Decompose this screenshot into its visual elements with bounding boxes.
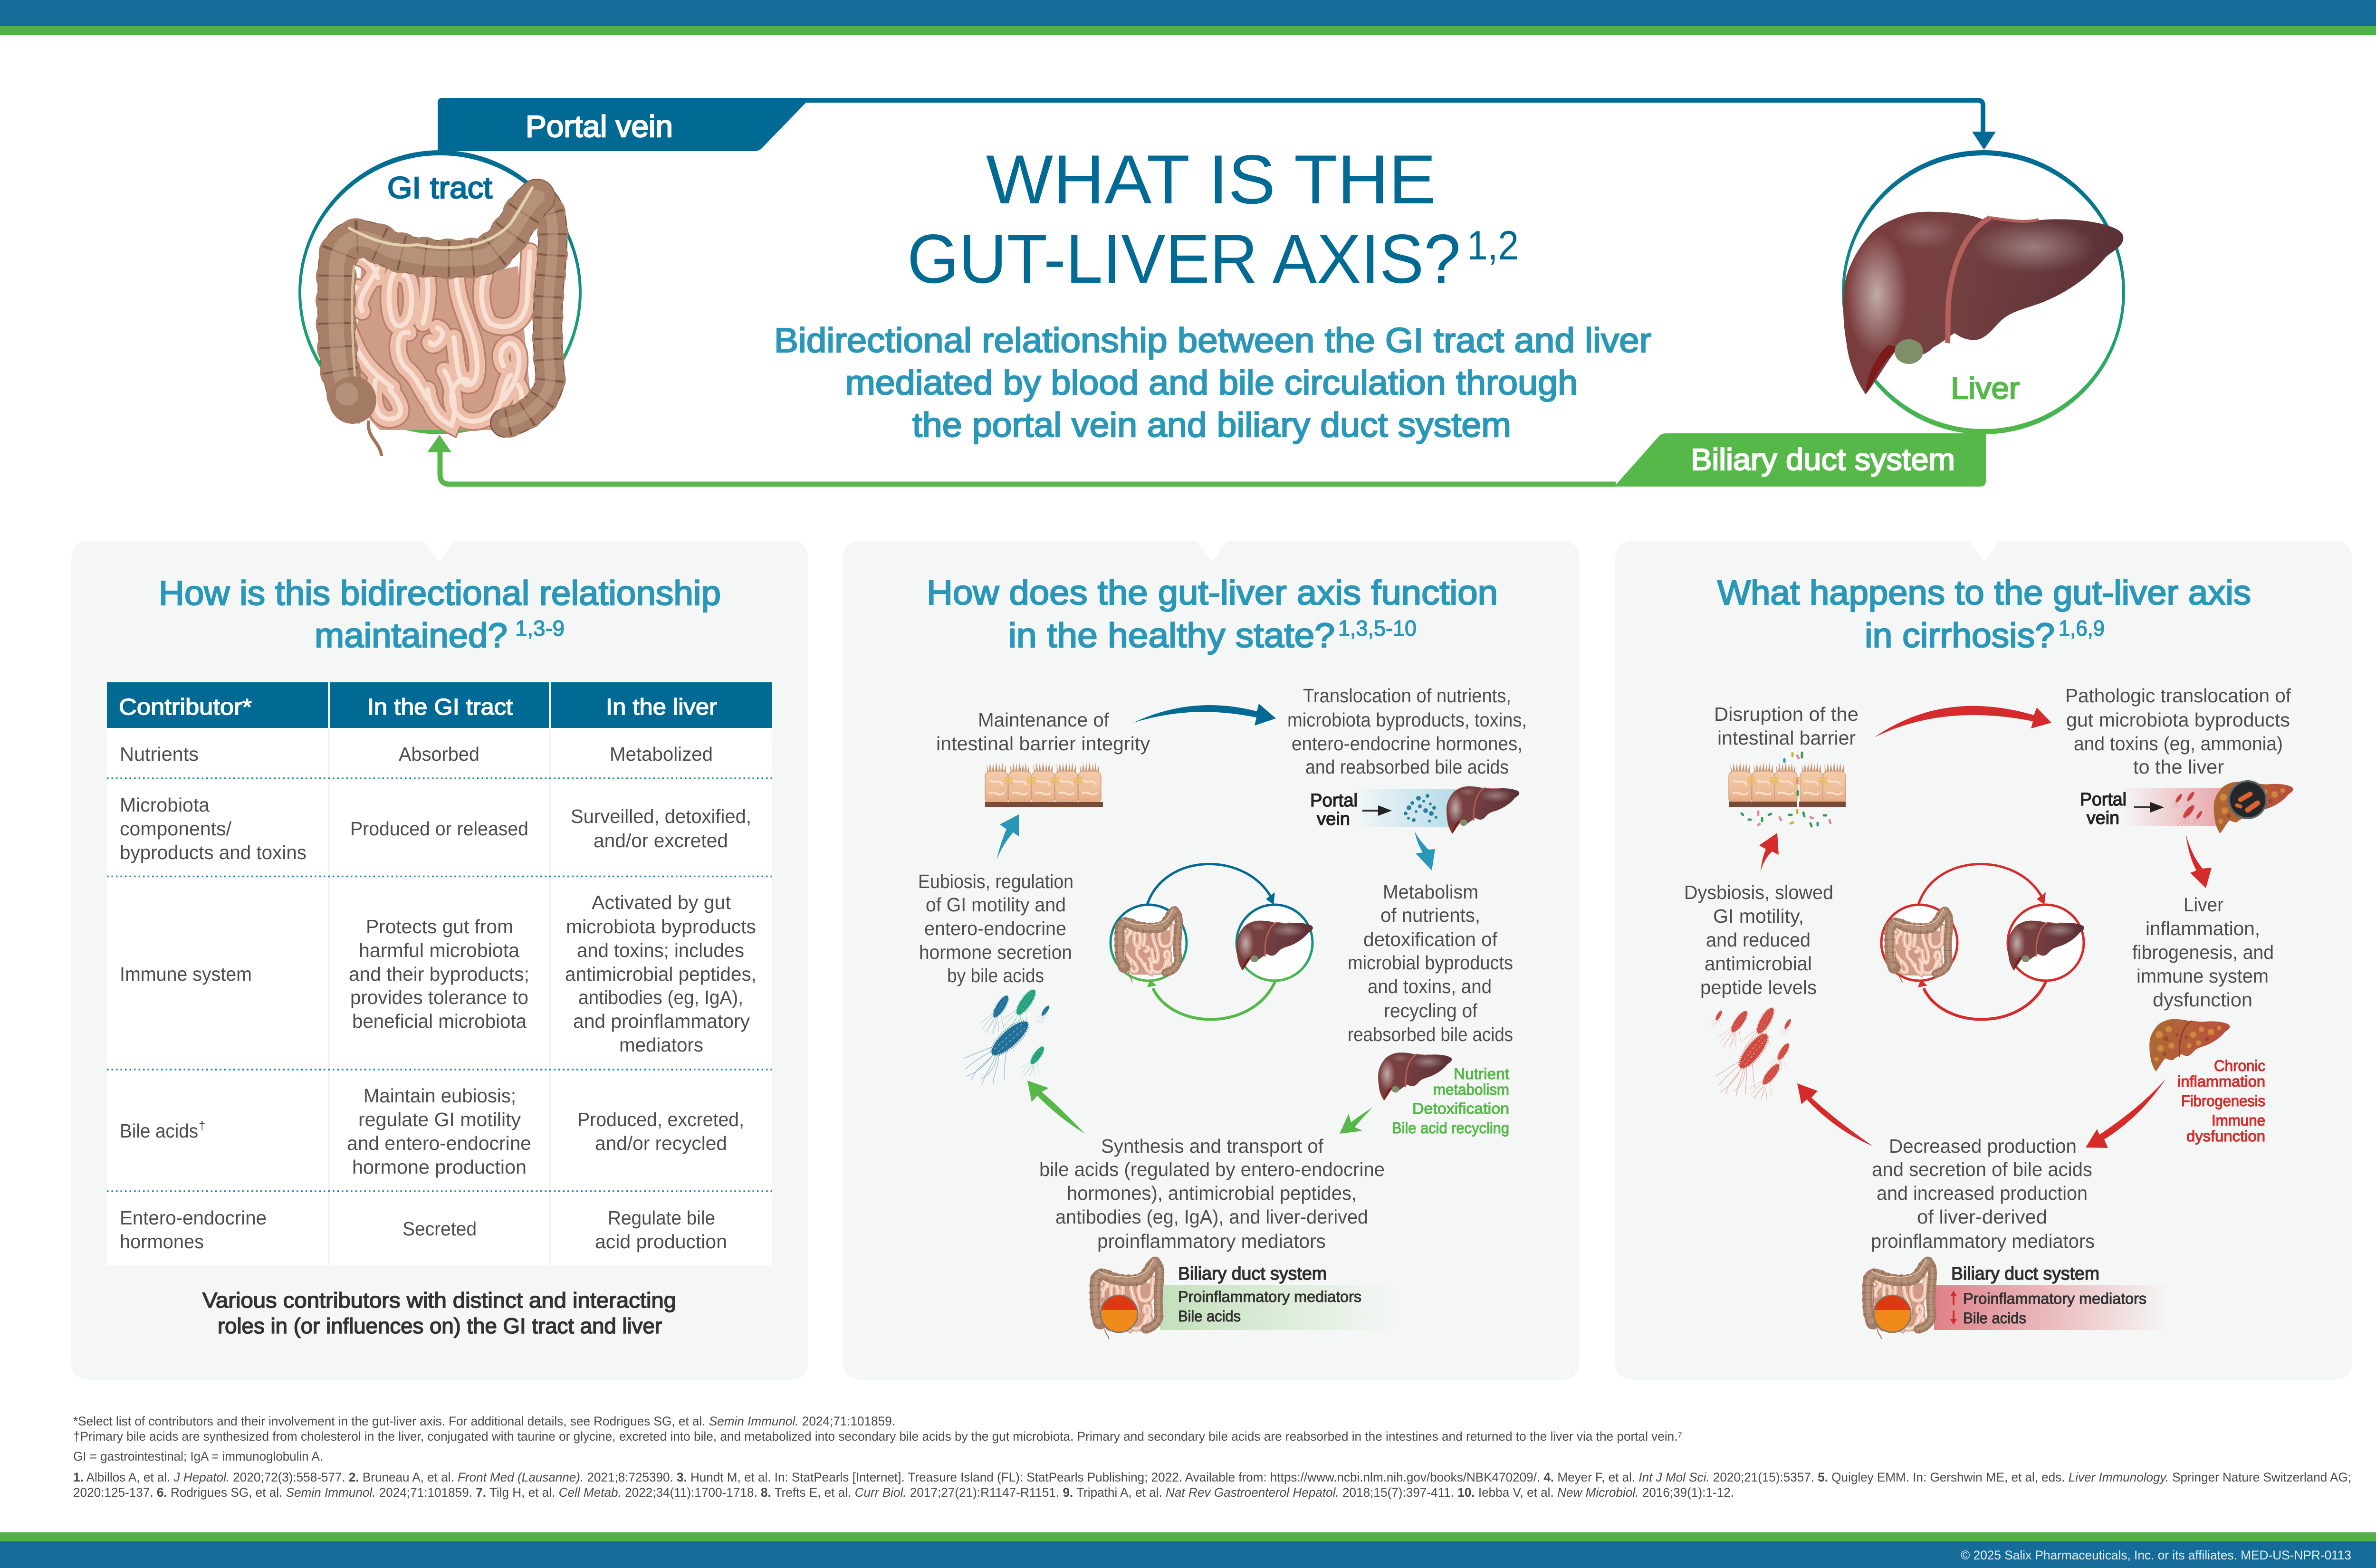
contributors table: byproducts and toxins [120,841,307,863]
heading [1717,574,2251,655]
liver with functions: Bile acid recycling [1392,1119,1509,1137]
contributors table: components/ [120,818,232,840]
contributors table: Metabolized [610,743,713,765]
contributors table: provides tolerance to [350,986,528,1008]
step: decreased production: Decreased production [1889,1135,2077,1157]
contributors table: and entero-endocrine [347,1132,531,1154]
footnotes and references [73,1414,2351,1500]
cirrhotic liver with effects: Chronic [2214,1057,2265,1074]
liver circle with liver: Liver [1951,371,2020,405]
portal vein graphic: vein [1317,809,1350,829]
heading [927,574,1498,655]
step: metabolism: detoxification of [1363,928,1498,950]
step: translocation: entero-endocrine hormones, [1292,733,1523,755]
step: barrier integrity: Maintenance of [978,709,1110,731]
panel: how is this relationship maintained [71,541,808,1380]
table takeaway: roles in (or influences on) the GI tract and liver [218,1314,662,1338]
biliary duct graphic: Proinflammatory mediators [1178,1288,1361,1305]
contributors table: and toxins; includes [577,939,744,961]
heading: What happens to the gut-liver axis [1717,574,2251,612]
contributors table: harmful microbiota [359,939,519,961]
contributors table: † [199,1119,205,1133]
biliary duct connector with tab and arrow: Biliary duct system [1691,442,1955,477]
step: dysbiosis: GI motility, [1713,905,1804,927]
step: decreased production: of liver-derived [1917,1206,2047,1228]
contributors table: Activated by gut [592,891,731,913]
liver with functions: Detoxification [1412,1100,1509,1117]
panel: cirrhosis [1615,541,2352,1380]
heading: How does the gut-liver axis function [927,574,1498,612]
contributors table: and proinflammatory [573,1010,750,1032]
step: liver inflammation: immune system [2136,965,2269,987]
contributors table: Protects gut from [366,916,513,937]
contributors table: and/or excreted [594,830,728,851]
step: eubiosis: of GI motility and [926,894,1066,916]
step: synthesis [1039,1135,1385,1252]
arrow: liver to decreased production [2086,1079,2166,1148]
step: dysbiosis: peptide levels [1700,976,1817,998]
arrow: liver to synthesis [1340,1107,1373,1134]
top header bars [0,0,2376,35]
step: translocation [1287,685,1527,778]
contributors table: and/or recycled [595,1132,727,1154]
contributors table: hormones [120,1231,204,1252]
step: pathologic translocation: to the liver [2133,756,2224,778]
contributors table: hormone production [352,1156,527,1178]
contributors table: Produced or released [350,818,528,840]
portal vein graphic with cirrhotic liver: Portal [2080,790,2127,810]
biliary duct graphic: Bile acids [1178,1308,1241,1325]
liver with functions: metabolism [1433,1081,1509,1098]
biliary duct graphic: Biliary duct system [1178,1264,1327,1284]
contributors table: Microbiota [120,794,210,816]
step: decreased production: and increased production [1877,1182,2088,1204]
step: eubiosis: Eubiosis, regulation [918,870,1073,892]
footnotes and references: GI = gastrointestinal; IgA = immunoglobulin A. [73,1449,323,1463]
title: GUT-LIVER AXIS? [907,220,1461,297]
heading: 1,3,5-10 [1338,616,1417,641]
step: dysbiosis: antimicrobial [1705,953,1812,975]
portal vein connector with tab and arrow [438,98,1996,151]
portal vein graphic with cirrhotic liver: vein [2087,808,2119,828]
biliary duct connector with tab and arrow [427,433,1986,487]
biliary duct graphic cirrhosis: Bile acids [1963,1310,2026,1327]
step: eubiosis: entero-endocrine [924,918,1066,939]
arrow: barrier to translocation [1133,704,1276,726]
arrow: decreased production to dysbiosis [1797,1083,1873,1146]
contributors table: Bile acids [120,1120,198,1142]
contributors table: mediators [619,1034,703,1056]
table takeaway [202,1288,676,1338]
step: liver inflammation: dysfunction [2153,989,2252,1011]
bottom footer bars with copyright [0,1532,2376,1568]
panel: healthy state [843,541,1580,1380]
step: synthesis: bile acids (regulated by entero-endocrine [1039,1158,1385,1180]
step: liver inflammation: Liver [2184,894,2223,916]
step: metabolism: and toxins, and [1368,975,1492,997]
step: decreased production: proinflammatory mediators [1871,1230,2095,1252]
cirrhotic liver with effects: dysfunction [2186,1128,2265,1145]
icon: intestinal cells [985,762,1103,807]
contributors table: and their byproducts; [349,963,529,985]
portal vein graphic [1310,786,1519,834]
GI tract circle with intestines: GI tract [387,171,492,205]
title: 1,2 [1467,223,1519,268]
GI tract circle with intestines [298,150,582,456]
step: liver inflammation: inflammation, [2146,918,2260,939]
portal vein graphic with cirrhotic liver [2080,781,2293,833]
arrow: synthesis to microbiota [1027,1080,1085,1134]
contributors table: beneficial microbiota [352,1010,527,1032]
step: eubiosis: hormone secretion [919,941,1072,963]
portal vein connector with tab and arrow: Portal vein [526,109,673,143]
contributors table: antibodies (eg, IgA), [578,986,743,1008]
icon: disrupted intestinal cells [1729,753,1846,826]
portal vein graphic: Portal [1310,791,1358,811]
cirrhotic liver with effects: Immune [2212,1112,2265,1129]
heading: maintained? [315,617,508,655]
step: barrier integrity: intestinal barrier integrity [936,733,1150,755]
contributors table: Surveilled, detoxified, [571,805,751,827]
contributors table: Contributor* [119,695,252,720]
step: metabolism: Metabolism [1383,881,1478,903]
contributors table: Regulate bile [608,1207,715,1229]
step: pathologic translocation: and toxins (eg, ammonia) [2074,733,2283,755]
footnotes and references: *Select list of contributors and their involvement in the gut-liver axis. For additional details, see Rodrigues SG, et al. Semin Immunol. 2024;71:101859. [73,1414,895,1428]
step: metabolism: reabsorbed bile acids [1348,1023,1513,1045]
icon: dysbiotic microbiota [1709,1004,1798,1108]
contributors table: antimicrobial peptides, [565,963,757,985]
contributors table: Secreted [402,1218,477,1240]
step: barrier integrity [936,709,1150,755]
step: synthesis: hormones), antimicrobial peptides, [1067,1182,1357,1204]
heading: 1,3-9 [515,616,565,641]
arrow: translocation to inflammation [2186,834,2212,888]
subtitle: the portal vein and biliary duct system [912,406,1511,444]
contributors table [107,682,772,1265]
step: pathologic translocation [2065,685,2291,778]
contributors table: Entero-endocrine [120,1207,267,1229]
step: eubiosis [918,870,1073,986]
subtitle: Bidirectional relationship between the GI tract and liver [774,322,1651,360]
heading: in cirrhosis? [1865,617,2055,655]
title [907,141,1519,297]
step: metabolism: recycling of [1384,1000,1478,1022]
arrow: dysbiosis to disruption [1759,833,1779,871]
step: liver inflammation [2132,894,2274,1011]
icon: healthy microbiota [956,984,1054,1098]
step: barrier disruption [1714,703,1859,749]
step: metabolism: of nutrients, [1380,904,1480,926]
bottom footer bars with copyright: © 2025 Salix Pharmaceuticals, Inc. or its affiliates. MED-US-NPR-0113 [1961,1548,2351,1562]
step: translocation: Translocation of nutrients, [1303,685,1511,707]
step: barrier disruption: intestinal barrier [1717,727,1856,749]
step: barrier disruption: Disruption of the [1714,703,1859,725]
footnotes and references: †Primary bile acids are synthesized from cholesterol in the liver, conjugated with taurine or glycine, excreted into bile, and metabolized into secondary bile acids by the gut microbiota. Primary and secondary bile acids are reabsorbed in the intestines and returned to the liver via the portal vein.⁷ [73,1429,1682,1444]
step: metabolism [1348,881,1513,1045]
arrow: disruption to translocation [1874,706,2051,737]
biliary duct graphic cirrhosis [1866,1259,2170,1339]
footnotes and references: 2020:125-137. 6. Rodrigues SG, et al. Semin Immunol. 2024;71:101859. 7. Tilg H, et al. Cell Metab. 2022;34(11):1700-1718. 8. Trefts E, et al. Curr Biol. 2017;27(21):R1147-R1151. 9. Tripathi A, et al. Nat Rev Gastroenterol Hepatol. 2018;15(7):397-411. 10. Iebba V, et al. New Microbiol. 2016;39(1):1-12. [73,1485,1734,1500]
table takeaway: Various contributors with distinct and interacting [202,1288,676,1312]
step: synthesis: Synthesis and transport of [1101,1135,1324,1157]
arrow: eubiosis to barrier [996,814,1019,860]
subtitle: mediated by blood and bile circulation through [845,364,1578,402]
biliary duct graphic cirrhosis: Biliary duct system [1951,1264,2099,1284]
step: metabolism: microbial byproducts [1348,952,1513,974]
step: decreased production [1871,1135,2095,1252]
step: synthesis: antibodies (eg, IgA), and liver-derived [1055,1206,1368,1228]
arrow: translocation to metabolism [1415,832,1435,870]
contributors table: Immune system [120,963,252,985]
biliary duct graphic cirrhosis: Proinflammatory mediators [1963,1290,2146,1307]
contributors table: Maintain eubiosis; [364,1085,516,1107]
step: dysbiosis [1684,881,1833,998]
step: translocation: microbiota byproducts, toxins, [1287,709,1527,731]
contributors table: microbiota byproducts [566,916,756,937]
center cirrhotic cycle diagram [1881,864,2084,1019]
contributors table: In the GI tract [367,695,513,720]
step: synthesis: proinflammatory mediators [1097,1230,1326,1252]
subtitle [774,322,1651,444]
title: WHAT IS THE [986,141,1436,218]
step: dysbiosis: Dysbiosis, slowed [1684,881,1833,903]
step: translocation: and reabsorbed bile acids [1305,756,1509,778]
footnotes and references: 1. Albillos A, et al. J Hepatol. 2020;72(3):558-577. 2. Bruneau A, et al. Front Med (Lausanne). 2021;8:725390. 3. Hundt M, et al. In: StatPearls [Internet]. Treasure Island (FL): StatPearls Publishing; 2022. Available from: https://www.ncbi.nlm.nih.gov/books/NBK470209/. 4. Meyer F, et al. Int J Mol Sci. 2020;21(15):5357. 5. Quigley EMM. In: Gershwin ME, et al, eds. Liver Immunology. Springer Nature Switzerland AG; [73,1470,2351,1484]
step: eubiosis: by bile acids [947,965,1044,986]
heading: How is this bidirectional relationship [159,574,721,612]
center gut-liver cycle diagram [1111,864,1313,1019]
heading [159,574,721,655]
contributors table: regulate GI motility [358,1109,521,1130]
step: pathologic translocation: gut microbiota byproducts [2066,709,2290,731]
liver circle with liver [1842,150,2125,434]
liver with functions [1378,1052,1509,1137]
contributors table: In the liver [606,695,717,720]
liver with functions: Nutrient [1454,1065,1509,1082]
heading: 1,6,9 [2059,616,2105,641]
cirrhotic liver with effects: inflammation [2177,1073,2265,1090]
cirrhotic liver with effects: Fibrogenesis [2181,1092,2265,1109]
contributors table: Nutrients [120,743,199,765]
biliary duct graphic [1093,1259,1399,1339]
step: decreased production: and secretion of bile acids [1872,1158,2092,1180]
step: pathologic translocation: Pathologic translocation of [2065,685,2291,707]
contributors table: Produced, excreted, [577,1109,744,1130]
contributors table: Absorbed [399,743,479,765]
step: liver inflammation: fibrogenesis, and [2132,941,2274,963]
cirrhotic liver with effects [2149,1019,2265,1145]
heading: in the healthy state? [1008,617,1335,655]
step: dysbiosis: and reduced [1706,929,1811,951]
contributors table: acid production [595,1231,727,1252]
